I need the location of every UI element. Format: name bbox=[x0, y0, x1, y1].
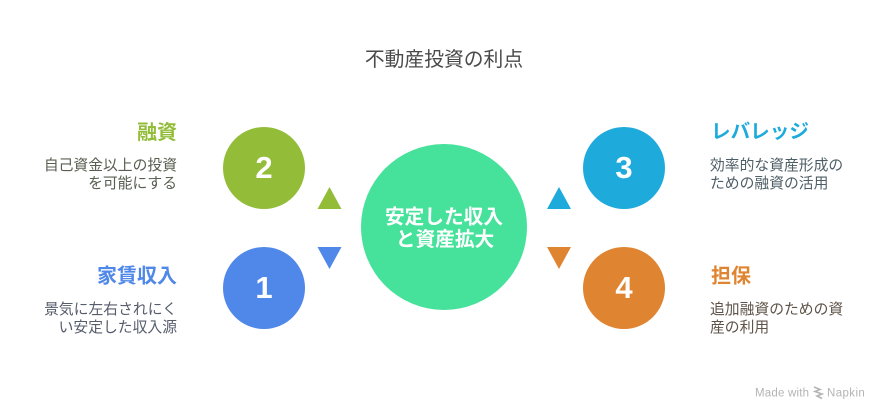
number circle 3 bbox=[583, 127, 665, 209]
central circle: 安定した収入 bbox=[385, 206, 503, 228]
arrow: down orange bbox=[547, 247, 571, 269]
number circle 3: 3 bbox=[615, 150, 633, 185]
arrow: up cyan bbox=[547, 187, 571, 209]
text block: 家賃収入 description: い安定した収入源 bbox=[59, 319, 177, 336]
watermark: Made with Napkin bbox=[755, 387, 865, 400]
panel: 担保 bbox=[547, 247, 843, 336]
panel: レバレッジ bbox=[547, 121, 843, 209]
panel: 融資 bbox=[44, 121, 342, 209]
title: 不動産投資の利点 bbox=[365, 49, 523, 71]
watermark: Made with Napkin: Napkin bbox=[827, 388, 865, 400]
arrow: down blue bbox=[318, 247, 342, 269]
text block: 融資 description: を可能にする bbox=[88, 175, 177, 192]
number circle 4 bbox=[583, 247, 665, 329]
arrow: up green bbox=[318, 187, 342, 209]
number circle 1 bbox=[223, 247, 305, 329]
number circle 2: 2 bbox=[255, 150, 273, 185]
text block: 担保 description: 追加融資のための資 bbox=[710, 301, 843, 318]
text block: 家賃収入 description: 景気に左右されにく bbox=[44, 301, 177, 318]
text block: レバレッジ description: 効率的な資産形成の bbox=[710, 157, 843, 174]
heading: 担保: 担保 bbox=[711, 264, 751, 288]
central circle: と資産拡大 bbox=[396, 229, 495, 251]
text block: レバレッジ description: ための融資の活用 bbox=[710, 175, 828, 192]
central circle bbox=[361, 144, 527, 310]
heading: 融資: 融資 bbox=[137, 121, 177, 144]
panel: 家賃収入 bbox=[44, 247, 342, 336]
icon: Napkin logo bbox=[814, 387, 822, 398]
number circle 1: 1 bbox=[255, 270, 273, 305]
number circle 2 bbox=[223, 127, 305, 209]
text block: レバレッジ description bbox=[710, 157, 843, 192]
text block: 担保 description: 産の利用 bbox=[710, 319, 769, 336]
text block: 家賃収入 description bbox=[44, 301, 177, 336]
number circle 4: 4 bbox=[615, 270, 633, 305]
text block: 担保 description bbox=[710, 301, 843, 336]
text block: 融資 description bbox=[44, 157, 177, 192]
text block: 融資 description: 自己資金以上の投資 bbox=[44, 157, 177, 174]
watermark: Made with Napkin: Made with bbox=[755, 388, 809, 400]
heading: レバレッジ: レバレッジ bbox=[711, 121, 809, 143]
heading: 家賃収入: 家賃収入 bbox=[97, 264, 177, 288]
